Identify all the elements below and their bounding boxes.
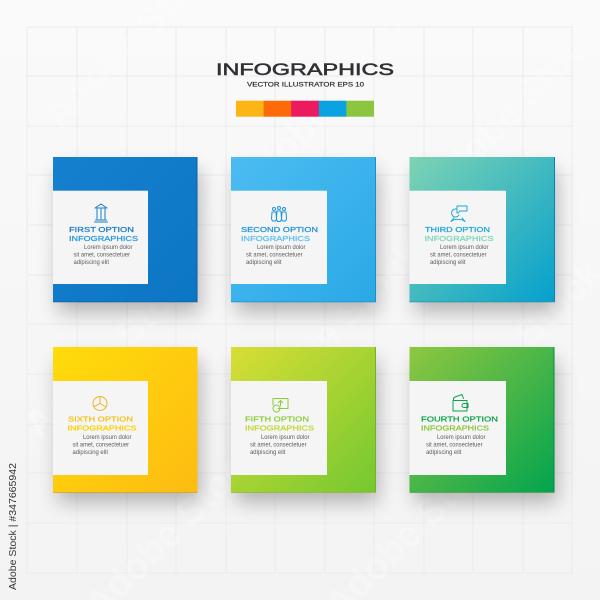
body text: Lorem ipsum dolor: [84, 244, 133, 251]
icon: person with speech bubble: [451, 206, 467, 222]
subheading: INFOGRAPHICS: [69, 234, 138, 243]
body text: adipiscing elit: [74, 259, 109, 266]
body text: adipiscing elit: [246, 259, 282, 266]
body text: sit amet, consectetuer: [72, 442, 130, 448]
heading: second option: SECOND OPTION: [241, 225, 318, 234]
body text: Lorem ipsum dolor: [440, 244, 489, 251]
body text: adipiscing elit: [250, 449, 286, 456]
subheading: INFOGRAPHICS: [424, 234, 494, 243]
subheading: INFOGRAPHICS: [68, 424, 137, 433]
panel: second option: [231, 157, 378, 312]
text: Adobe Stock: [227, 12, 421, 206]
body text: Lorem ipsum dolor: [83, 434, 132, 441]
body text: [430, 244, 489, 266]
subtitle: VECTOR ILLUSTRATOR EPS 10: [247, 82, 365, 88]
icon: money transfer: [273, 398, 288, 412]
title: INFOGRAPHICS: [216, 60, 394, 79]
heading: sixth option: SIXTH OPTION: [68, 415, 133, 424]
subheading: INFOGRAPHICS: [241, 234, 310, 243]
body text: [74, 244, 133, 266]
panel: fifth option: [231, 347, 378, 502]
subheading: INFOGRAPHICS: [421, 424, 489, 433]
body text: Lorem ipsum dolor: [437, 434, 486, 441]
panel: third option: [410, 157, 557, 312]
text: Adobe Stock: [17, 252, 211, 446]
body text: adipiscing elit: [72, 449, 108, 456]
panel: fourth option: [410, 347, 557, 502]
body text: Lorem ipsum dolor: [261, 434, 310, 441]
text: Adobe Stock: [237, 232, 431, 426]
panel: first option: [53, 157, 200, 312]
colour bar: [236, 101, 374, 117]
heading: first option: FIRST OPTION: [69, 225, 134, 234]
icon: wallet: [453, 394, 468, 411]
body text: [250, 434, 310, 456]
body text: sit amet, consectetuer: [74, 252, 131, 258]
heading: fifth option: FIFTH OPTION: [245, 415, 309, 424]
body text: adipiscing elit: [430, 259, 466, 266]
heading: fourth option: FOURTH OPTION: [421, 415, 498, 424]
body text: adipiscing elit: [426, 449, 462, 456]
heading: third option: THIRD OPTION: [425, 225, 490, 234]
body text: [426, 434, 486, 456]
body text: [246, 244, 306, 266]
body text: sit amet, consectetuer: [250, 442, 307, 448]
body text: Lorem ipsum dolor: [257, 244, 306, 251]
body text: sit amet, consectetuer: [426, 442, 483, 448]
body text: sit amet, consectetuer: [430, 252, 487, 258]
stock id label: Adobe Stock | #347665942: [8, 463, 19, 590]
subheading: INFOGRAPHICS: [245, 424, 314, 433]
body text: sit amet, consectetuer: [246, 252, 303, 258]
icon: people: [272, 206, 286, 222]
panel: sixth option: [53, 347, 200, 502]
icon: pie chart: [93, 396, 107, 410]
icon: bank: [94, 204, 108, 222]
body text: [72, 434, 132, 456]
